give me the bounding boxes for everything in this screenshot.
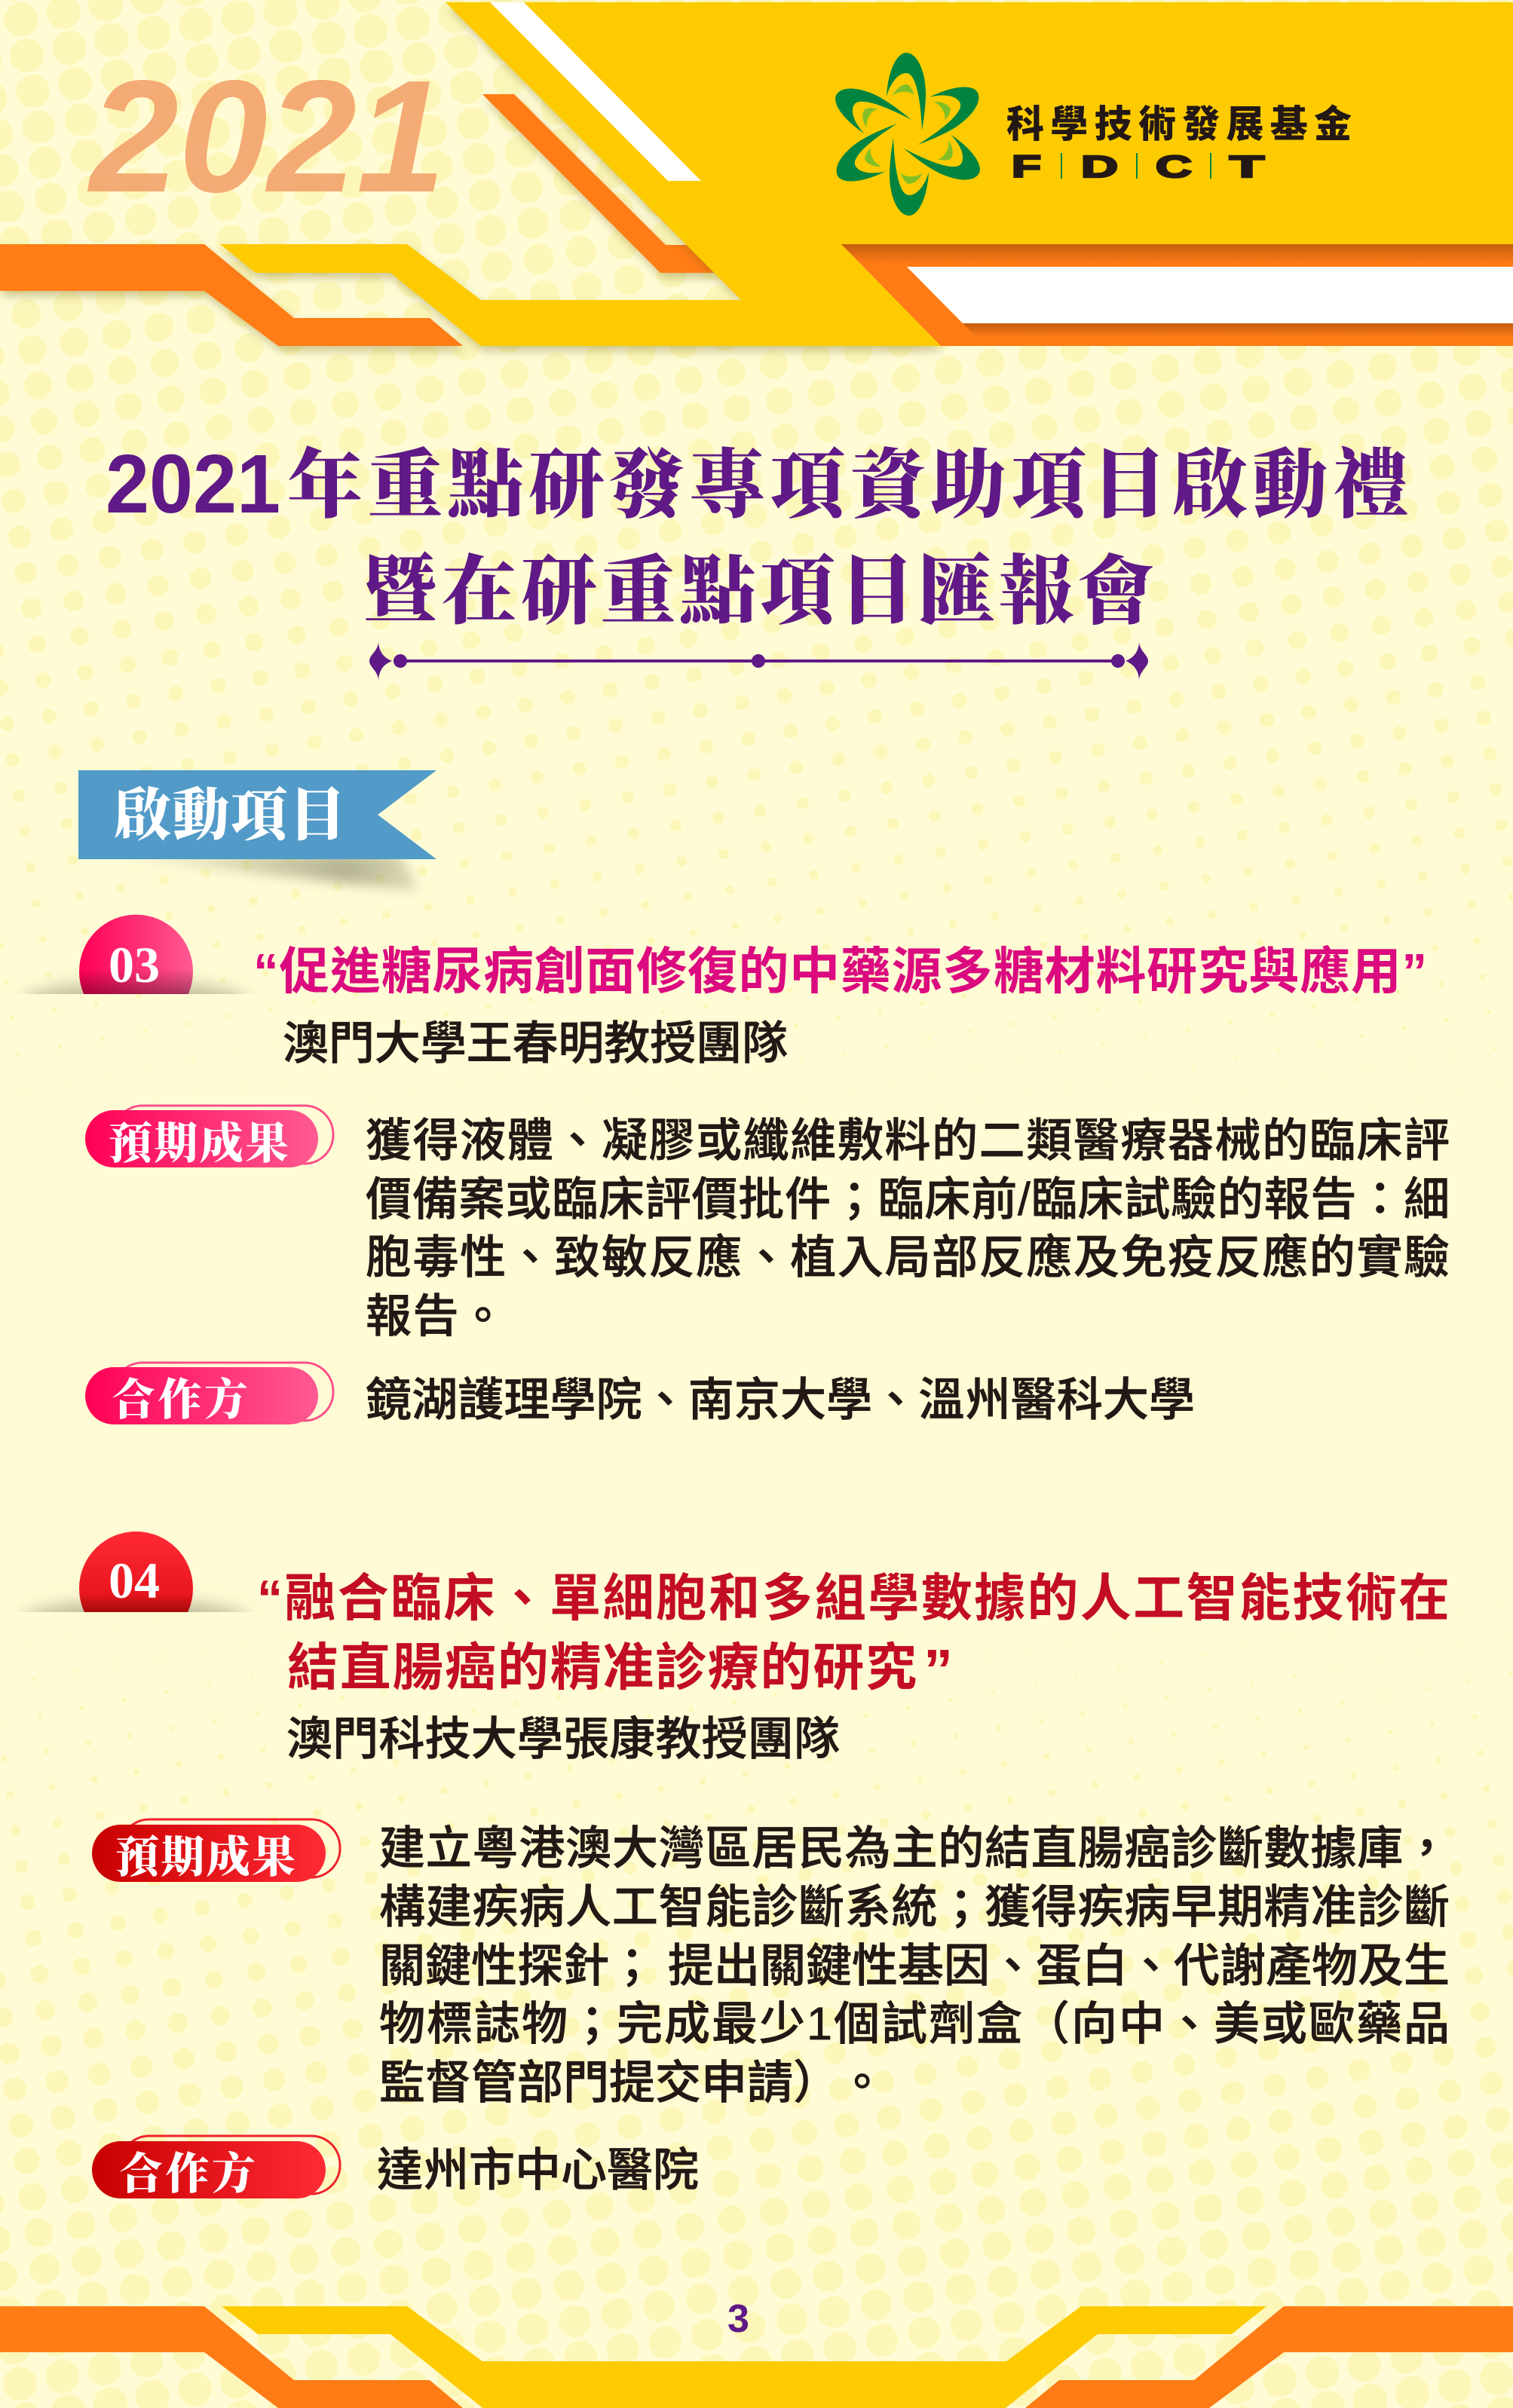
project 03 title: “促進糖尿病創面修復的中藥源多糖材料研究與應用” bbox=[253, 944, 1427, 1000]
project 04 title bbox=[257, 1570, 1450, 1703]
expected results text 03: 價備案或臨床評價批件；臨床前/臨床試驗的報告：細 bbox=[366, 1173, 1450, 1225]
badge 04: 04 bbox=[109, 1552, 160, 1609]
expected results text 03: 獲得液體、凝膠或纖維敷料的二類醫療器械的臨床評 bbox=[366, 1115, 1450, 1166]
expected results text 04: 構建疾病人工智能診斷系統；獲得疾病早期精准診斷 bbox=[379, 1881, 1450, 1932]
partners text 04: 達州市中心醫院 bbox=[377, 2144, 699, 2195]
section ribbon: 啟動項目: 啟動項目 bbox=[114, 785, 346, 848]
logo chinese name: 科學技術發展基金 bbox=[1006, 103, 1352, 145]
expected results text 04: ） bbox=[793, 2057, 839, 2108]
footer left orange band bbox=[0, 2306, 463, 2408]
expected results text 03 bbox=[366, 1115, 1450, 1342]
title divider ornament bbox=[369, 642, 1148, 680]
icon: six petal flower bbox=[826, 53, 989, 216]
page number: 3 bbox=[727, 2297, 749, 2341]
expected results text 04 bbox=[379, 1822, 1450, 2108]
badge 03 bbox=[21, 915, 250, 994]
pill: partners 04 bbox=[92, 2136, 340, 2198]
year 2021: 2021 bbox=[87, 47, 446, 225]
pill: partners 03 bbox=[85, 1363, 333, 1424]
logo letters FDCT: D bbox=[1081, 149, 1118, 184]
title line 1: 2021 bbox=[106, 438, 280, 531]
pill: expected results 04: 預期成果 bbox=[115, 1833, 296, 1882]
logo letters FDCT: T bbox=[1230, 149, 1264, 184]
header diagonal orange stripe bbox=[482, 94, 715, 273]
header white panel bbox=[907, 267, 1513, 323]
header banner bbox=[0, 2, 1513, 346]
expected results text 04: 監督管部門提交申請 bbox=[379, 2057, 793, 2108]
footer banner bbox=[0, 2306, 1513, 2408]
header left orange band bbox=[0, 244, 463, 346]
project 04 title: “融合臨床、單細胞和多組學數據的人工智能技術在 bbox=[257, 1570, 1450, 1627]
project 04 bbox=[23, 1531, 1450, 2198]
expected results text 04: 。 bbox=[839, 2057, 885, 2108]
badge 04 bbox=[21, 1531, 250, 1612]
logo letters FDCT: C bbox=[1156, 149, 1192, 184]
title line 2: 暨在研重點項目匯報會 bbox=[362, 550, 1153, 634]
partners text 03: 鏡湖護理學院、南京大學、溫州醫科大學 bbox=[366, 1374, 1195, 1425]
section ribbon: 啟動項目 bbox=[78, 770, 436, 891]
project 03 team: 澳門大學王春明教授團隊 bbox=[283, 1017, 788, 1069]
pill: partners 03: 合作方 bbox=[112, 1375, 248, 1424]
expected results text 04: 關鍵性探針； 提出關鍵性基因、蛋白、代謝產物及生 bbox=[379, 1940, 1450, 1991]
footer right orange band bbox=[1025, 2306, 1513, 2408]
logo letters FDCT bbox=[1012, 149, 1264, 184]
title bbox=[106, 438, 1408, 634]
footer yellow tray bbox=[222, 2306, 1266, 2408]
project 03 bbox=[23, 915, 1450, 1425]
logo letters FDCT: F bbox=[1012, 149, 1041, 184]
logo: FDCT bbox=[826, 53, 1352, 216]
project 04 title: 結直腸癌的精准診療的研究 bbox=[287, 1639, 917, 1697]
badge 03: 03 bbox=[109, 936, 160, 993]
pill: expected results 04 bbox=[92, 1819, 340, 1882]
header white diagonal stripe bbox=[490, 2, 701, 181]
title line 1: 年重點研發專項資助項目啟動禮 bbox=[287, 444, 1408, 528]
expected results text 04: 物標誌物；完成最少1個試劑盒（向中、美或歐藥品 bbox=[379, 1998, 1450, 2049]
header main yellow shape bbox=[220, 2, 1513, 346]
header right orange band bbox=[841, 244, 1513, 346]
pill: partners 04: 合作方 bbox=[119, 2149, 256, 2198]
expected results text 04: 建立粵港澳大灣區居民為主的結直腸癌診斷數據庫， bbox=[379, 1822, 1450, 1874]
expected results text 03: 報告。 bbox=[366, 1290, 507, 1342]
expected results text 03: 胞毒性、致敏反應、植入局部反應及免疫反應的實驗 bbox=[366, 1232, 1450, 1283]
project 04 team: 澳門科技大學張康教授團隊 bbox=[286, 1713, 840, 1764]
project 04 title: ” bbox=[923, 1637, 953, 1703]
pill: expected results 03: 預期成果 bbox=[109, 1119, 289, 1168]
pill: expected results 03 bbox=[85, 1106, 333, 1168]
